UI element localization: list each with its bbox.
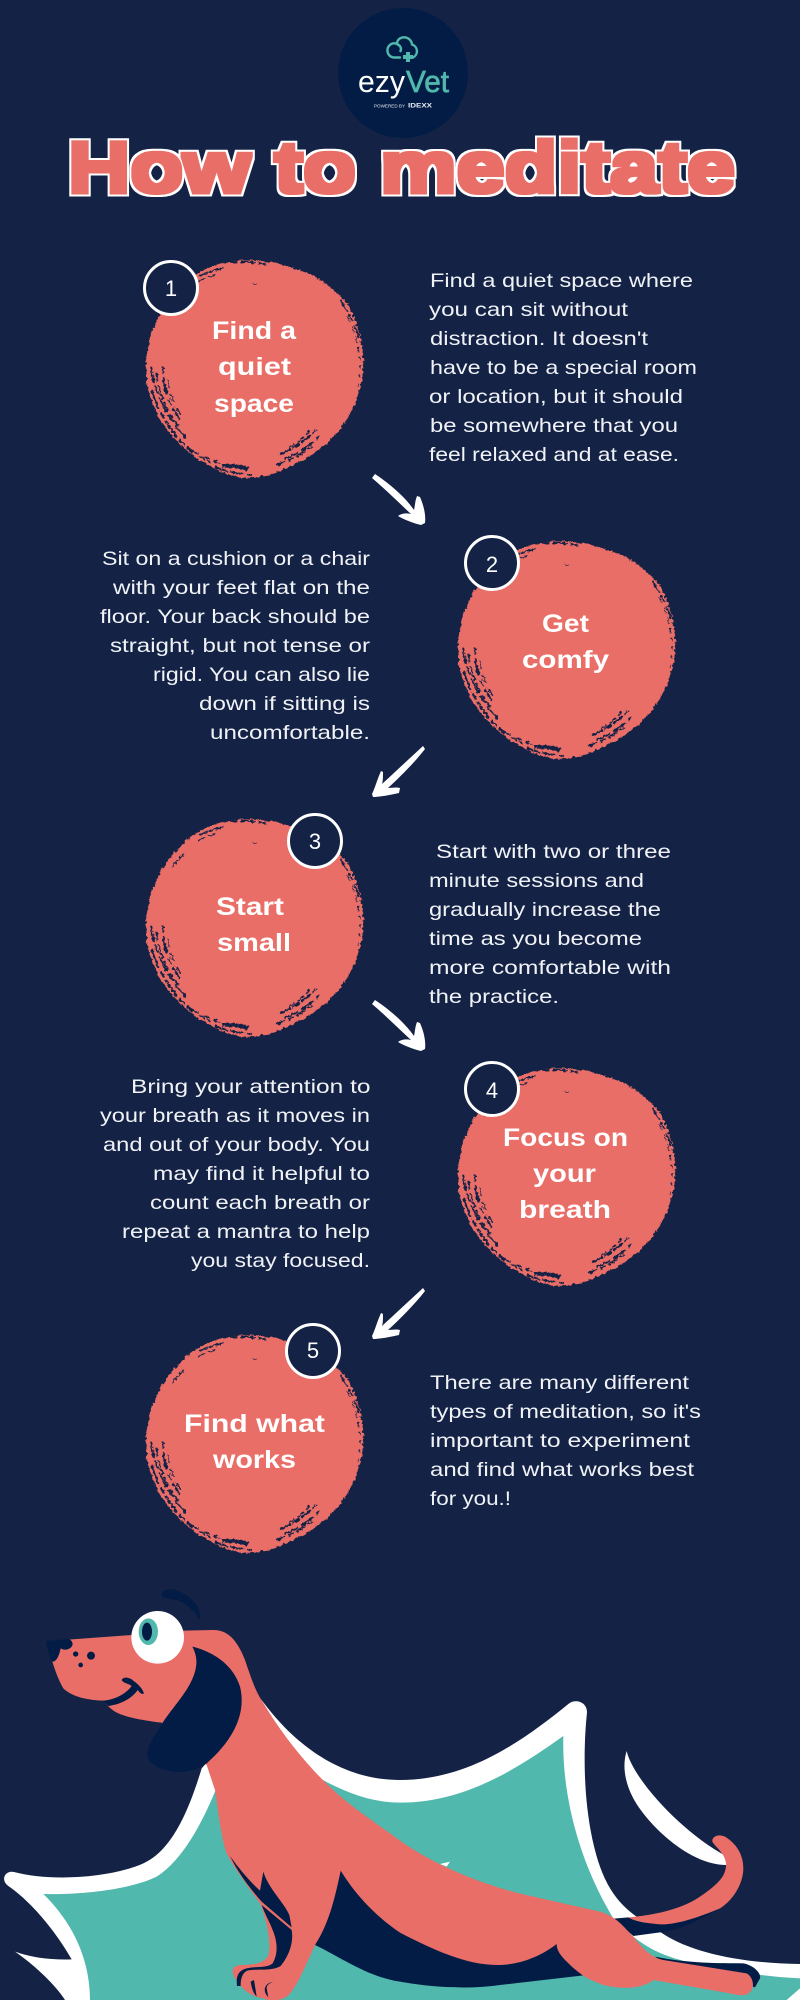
blob: step 2 bbox=[458, 541, 675, 759]
text block: step 3: more comfortable with bbox=[429, 957, 671, 979]
mat: small white fleck bbox=[440, 1862, 450, 1867]
text block: step 4: Bring your attention to bbox=[131, 1076, 371, 1098]
text block: step 5: types of meditation, so it's bbox=[430, 1401, 701, 1423]
text block: step 4: your breath as it moves in bbox=[100, 1105, 370, 1127]
arrow: step 4 to 5 bbox=[372, 1288, 425, 1339]
logo tagline: IDEXX bbox=[408, 102, 433, 110]
text block: step 2: Sit on a cushion or a chair bbox=[102, 548, 371, 570]
step 3 bbox=[146, 814, 363, 1037]
heading: Find a quiet space: space bbox=[214, 390, 294, 418]
illustration: dog stretching on mat bbox=[4, 1589, 800, 2000]
title: How to meditate bbox=[68, 129, 735, 208]
text block: step 3: the practice. bbox=[429, 986, 559, 1008]
text block: step 1: Find a quiet space where bbox=[430, 270, 693, 292]
heading: Find what works: works bbox=[212, 1446, 296, 1474]
step 4 bbox=[458, 1062, 675, 1286]
mat: white outline bbox=[4, 1700, 800, 2000]
dog: tail shadow bbox=[613, 1909, 718, 1936]
dog: ear bbox=[147, 1647, 242, 1772]
number badge 2 bbox=[466, 536, 518, 590]
text block: step 1: or location, but it should bbox=[429, 386, 683, 408]
text block: step 2: straight, but not tense or bbox=[110, 635, 371, 657]
heading: Get comfy: Get bbox=[542, 610, 590, 638]
number badge 2: 2 bbox=[486, 552, 498, 577]
text block: step 4: and out of your body. You bbox=[103, 1134, 370, 1156]
dog: eyebrow bbox=[161, 1589, 200, 1621]
blob: step 5 bbox=[146, 1335, 363, 1553]
dog: leg markings bbox=[230, 1856, 292, 1997]
number badge 3: 3 bbox=[309, 829, 321, 854]
dog: tail bbox=[628, 1835, 743, 1924]
text block: step 1: feel relaxed and at ease. bbox=[429, 444, 679, 466]
heading: Focus on your breath: breath bbox=[519, 1196, 611, 1224]
logo tagline: POWERED BY bbox=[374, 104, 405, 108]
text block: step 5: important to experiment bbox=[430, 1430, 691, 1452]
number badge 5: 5 bbox=[307, 1338, 319, 1363]
number badge 4 bbox=[466, 1062, 518, 1116]
text block: step 2: uncomfortable. bbox=[210, 722, 370, 744]
dog: eye bbox=[131, 1611, 184, 1664]
logo wordmark: ezy bbox=[358, 64, 405, 99]
heading: Find what works: Find what bbox=[184, 1410, 326, 1438]
number badge 1 bbox=[144, 262, 198, 314]
text block: step 4: you stay focused. bbox=[191, 1250, 370, 1272]
number badge 3 bbox=[288, 814, 342, 868]
number badge 4: 4 bbox=[486, 1078, 498, 1103]
logo wordmark: Vet bbox=[406, 64, 449, 99]
step 2 bbox=[458, 536, 675, 759]
number badge 5 bbox=[286, 1324, 340, 1378]
icon: cloud with plus bbox=[387, 37, 417, 62]
heading: Focus on your breath: Focus on bbox=[503, 1124, 628, 1152]
heading: Focus on your breath: your bbox=[533, 1160, 596, 1188]
text block: step 4: repeat a mantra to help bbox=[122, 1221, 370, 1243]
blob: step 3 bbox=[146, 819, 363, 1037]
heading: Get comfy: comfy bbox=[522, 646, 609, 674]
text block: step 1: you can sit without bbox=[429, 299, 629, 321]
text block: step 4: may find it helpful to bbox=[153, 1163, 370, 1185]
step 5 bbox=[146, 1324, 363, 1553]
mat: white crescent bbox=[624, 1751, 726, 1865]
text block: step 3: gradually increase the bbox=[429, 899, 661, 921]
blob: step 4 bbox=[458, 1068, 675, 1286]
dog: hind leg shadow bbox=[655, 1957, 760, 1987]
text block: step 5: and find what works best bbox=[430, 1459, 695, 1481]
dog: smile bbox=[103, 1678, 144, 1706]
arrow: step 1 to 2 bbox=[372, 474, 425, 525]
heading: Start small: Start bbox=[216, 893, 285, 921]
text block: step 2: down if sitting is bbox=[199, 693, 370, 715]
text block: step 2: with your feet flat on the bbox=[112, 577, 370, 599]
arrow: step 3 to 4 bbox=[372, 1000, 425, 1051]
text block: step 2: floor. Your back should be bbox=[100, 606, 370, 628]
heading: Find a quiet space: quiet bbox=[218, 353, 292, 381]
text block: step 5: There are many different bbox=[430, 1372, 690, 1394]
text block: step 1: distraction. It doesn't bbox=[430, 328, 649, 350]
text block: step 1: be somewhere that you bbox=[430, 415, 678, 437]
text block: step 2: rigid. You can also lie bbox=[153, 664, 370, 686]
heading: Start small: small bbox=[217, 929, 291, 957]
text block: step 5: for you.! bbox=[430, 1488, 511, 1510]
number badge 1: 1 bbox=[165, 276, 177, 301]
dog: body bbox=[47, 1630, 753, 2000]
dog: far legs in shadow bbox=[315, 1871, 593, 1987]
step 1 bbox=[144, 260, 363, 478]
text block: step 3: minute sessions and bbox=[429, 870, 644, 892]
arrow: step 2 to 3 bbox=[372, 746, 425, 797]
mat: teal surface bbox=[43, 1736, 800, 2000]
text block: step 3: Start with two or three bbox=[436, 841, 671, 863]
text block: step 4: count each breath or bbox=[150, 1192, 371, 1214]
blob: step 1 bbox=[146, 260, 363, 478]
logo: ezyVet badge bbox=[338, 8, 468, 138]
text block: step 3: time as you become bbox=[429, 928, 642, 950]
dog: nose and freckles bbox=[46, 1639, 95, 1667]
heading: Find a quiet space: Find a bbox=[212, 317, 297, 345]
text block: step 1: have to be a special room bbox=[430, 357, 697, 379]
